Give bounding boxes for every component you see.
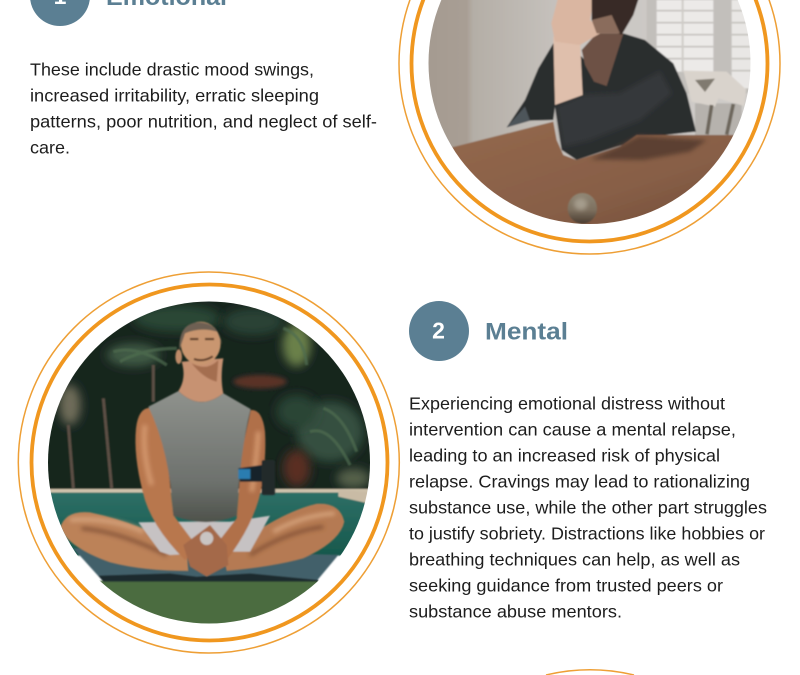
badge number 1 [30, 0, 90, 26]
badge number 2: 2 [432, 318, 445, 344]
pool [43, 492, 377, 556]
foliage [59, 305, 370, 488]
hand [551, 0, 603, 45]
section 3: top of next ring [546, 670, 634, 675]
body text: mental: Experiencing emotional distress without [409, 394, 725, 414]
shorts [138, 516, 270, 555]
body text: emotional: These include drastic mood swings, [30, 60, 314, 80]
window shutters [647, 0, 757, 93]
body text: emotional: increased irritability, erratic sleeping [30, 86, 319, 106]
forearm [553, 37, 583, 105]
heading: Mental: Mental [485, 318, 568, 346]
arms [135, 408, 198, 560]
outer ring, section 1 [399, 0, 780, 254]
neck [178, 358, 223, 402]
tank top [148, 391, 251, 522]
pool edge [50, 488, 368, 494]
head [181, 322, 221, 365]
body text: mental: breathing techniques can help, as well as [409, 550, 740, 570]
body text: mental: substance use, while the other part struggles [409, 498, 767, 518]
shirt [507, 33, 696, 160]
body text: mental: leading to an increased risk of physical [409, 446, 720, 466]
inner ring, section 2 [32, 284, 388, 640]
inner ring, section 1 [412, 0, 768, 242]
body text: emotional: patterns, poor nutrition, and neglect of self- [30, 112, 377, 132]
hair [592, 0, 639, 35]
blurred ball in foreground [568, 193, 597, 224]
body text: emotional: care. [30, 138, 70, 158]
table shadow [590, 136, 707, 160]
grass [43, 581, 377, 628]
body text: mental [409, 394, 767, 622]
body text: mental: relapse. Cravings may lead to rationalizing [409, 472, 750, 492]
legs [60, 512, 188, 571]
neck [582, 33, 623, 86]
armband [238, 460, 275, 495]
chair [683, 71, 746, 135]
section 1: emotional photo with rings [30, 0, 780, 254]
body text: mental: substance abuse mentors. [409, 602, 622, 622]
table [452, 121, 734, 224]
body text: mental: intervention can cause a mental relapse, [409, 420, 736, 440]
outer ring, section 2 [18, 272, 399, 653]
photo: man meditating by pool [43, 298, 377, 628]
yoga mat [73, 548, 338, 582]
body text: mental: to justify sobriety. Distractions like hobbies or [409, 524, 765, 544]
photo: man at table with head in hand [423, 0, 757, 233]
body text: mental: seeking guidance from trusted peers or [409, 576, 723, 596]
meditating man [60, 322, 344, 577]
badge number 2 [409, 301, 469, 361]
section 2: mental photo with rings [18, 272, 767, 653]
hands [183, 525, 228, 577]
body text: emotional [30, 60, 377, 158]
